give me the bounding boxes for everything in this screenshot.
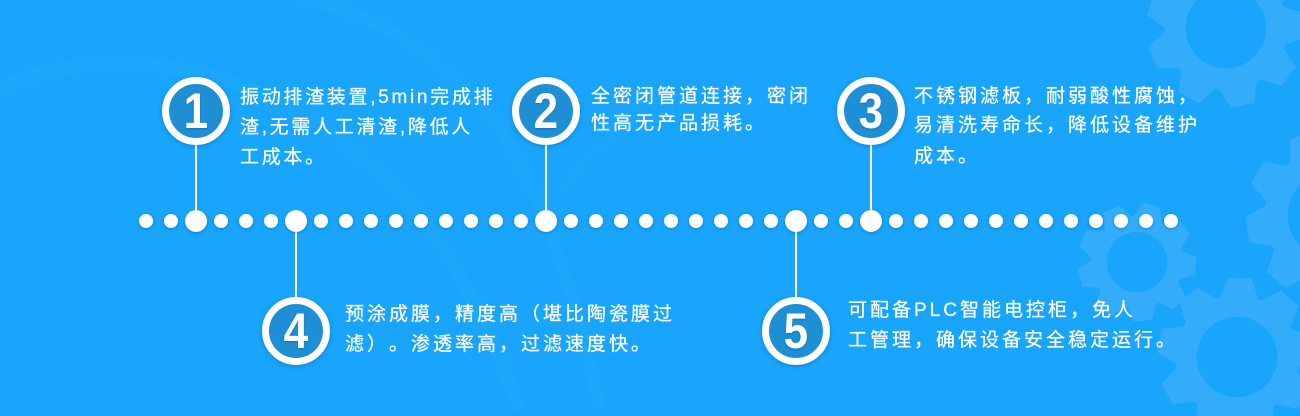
badge 4: 4: [284, 303, 308, 359]
text 1: 振动排渣装置,5min完成排: [240, 87, 495, 108]
badge 5: [762, 297, 830, 365]
text 5: [848, 300, 1178, 351]
badge 4: [262, 297, 330, 365]
badge 2: [512, 77, 580, 145]
text 3: 易清洗寿命长，降低设备维护: [914, 115, 1200, 136]
text 5: 可配备PLC智能电控柜，免人: [848, 300, 1136, 321]
gear far right: [1227, 112, 1300, 318]
gear top right: [1145, 0, 1300, 109]
text 3: 不锈钢滤板，耐弱酸性腐蚀，: [914, 86, 1200, 107]
text 3: [914, 86, 1200, 167]
dotted timeline: [138, 209, 1180, 235]
gear middle: [1070, 196, 1202, 329]
badge 1: 1: [184, 83, 208, 139]
badge 5: 5: [784, 303, 808, 359]
badge 3: [837, 77, 905, 145]
badge 1: [162, 77, 230, 145]
text 1: [240, 86, 495, 168]
text 4: 预涂成膜，精度高（堪比陶瓷膜过: [345, 304, 675, 325]
text 1: 渣,无需人工清渣,降低人: [240, 117, 473, 138]
text 4: [345, 304, 675, 355]
text 3: 成本。: [914, 146, 980, 167]
text 1: 工成本。: [240, 147, 327, 168]
text 2: [591, 86, 811, 134]
text 2: 全密闭管道连接，密闭: [591, 86, 811, 107]
text 4: 滤）。渗透率高，过滤速度快。: [345, 334, 653, 355]
badge 2: 2: [534, 83, 558, 139]
gear bottom right: [1156, 277, 1300, 416]
text 2: 性高无产品损耗。: [591, 113, 767, 134]
badge 3: 3: [859, 83, 883, 139]
text 5: 工管理，确保设备安全稳定运行。: [848, 330, 1178, 351]
